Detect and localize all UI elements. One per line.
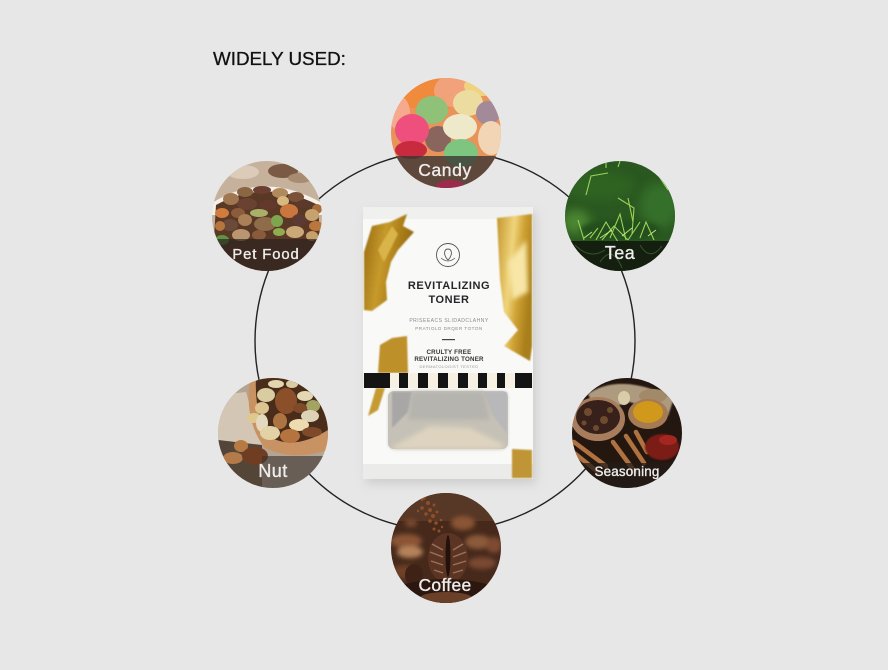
checker band	[363, 373, 533, 388]
label: Seasoning	[594, 464, 660, 479]
product name	[408, 280, 490, 306]
label: Candy	[418, 160, 472, 180]
claims	[414, 349, 484, 369]
claims: CRULTY FREE	[427, 349, 471, 356]
image circle: coffee	[390, 493, 502, 604]
image circle: nut	[218, 378, 328, 488]
claims: DERMATOLOGIST TESTED	[419, 364, 479, 369]
claims: REVITALIZING TONER	[414, 356, 484, 363]
label: Coffee	[418, 575, 472, 595]
label: Tea	[605, 243, 636, 263]
image circle: tea	[562, 161, 680, 271]
product name: TONER	[428, 294, 470, 306]
product: toner sachet	[363, 207, 536, 484]
image circle: seasoning	[571, 378, 682, 488]
small print	[409, 318, 489, 331]
clear window	[387, 390, 509, 450]
label: Nut	[258, 461, 288, 481]
small print: PRATIOLD DRQER TOTON	[415, 326, 483, 331]
gold brush strokes	[364, 214, 532, 478]
connecting ring	[255, 151, 635, 531]
logo emblem	[436, 244, 460, 266]
label: Pet Food	[232, 247, 300, 263]
title: WIDELY USED:	[213, 48, 346, 69]
product name: REVITALIZING	[408, 280, 490, 292]
image circle: candy	[391, 78, 501, 188]
small print: PRISEEACS SLIDADCLAHNY	[409, 318, 489, 324]
image circle: pet food	[212, 161, 323, 271]
